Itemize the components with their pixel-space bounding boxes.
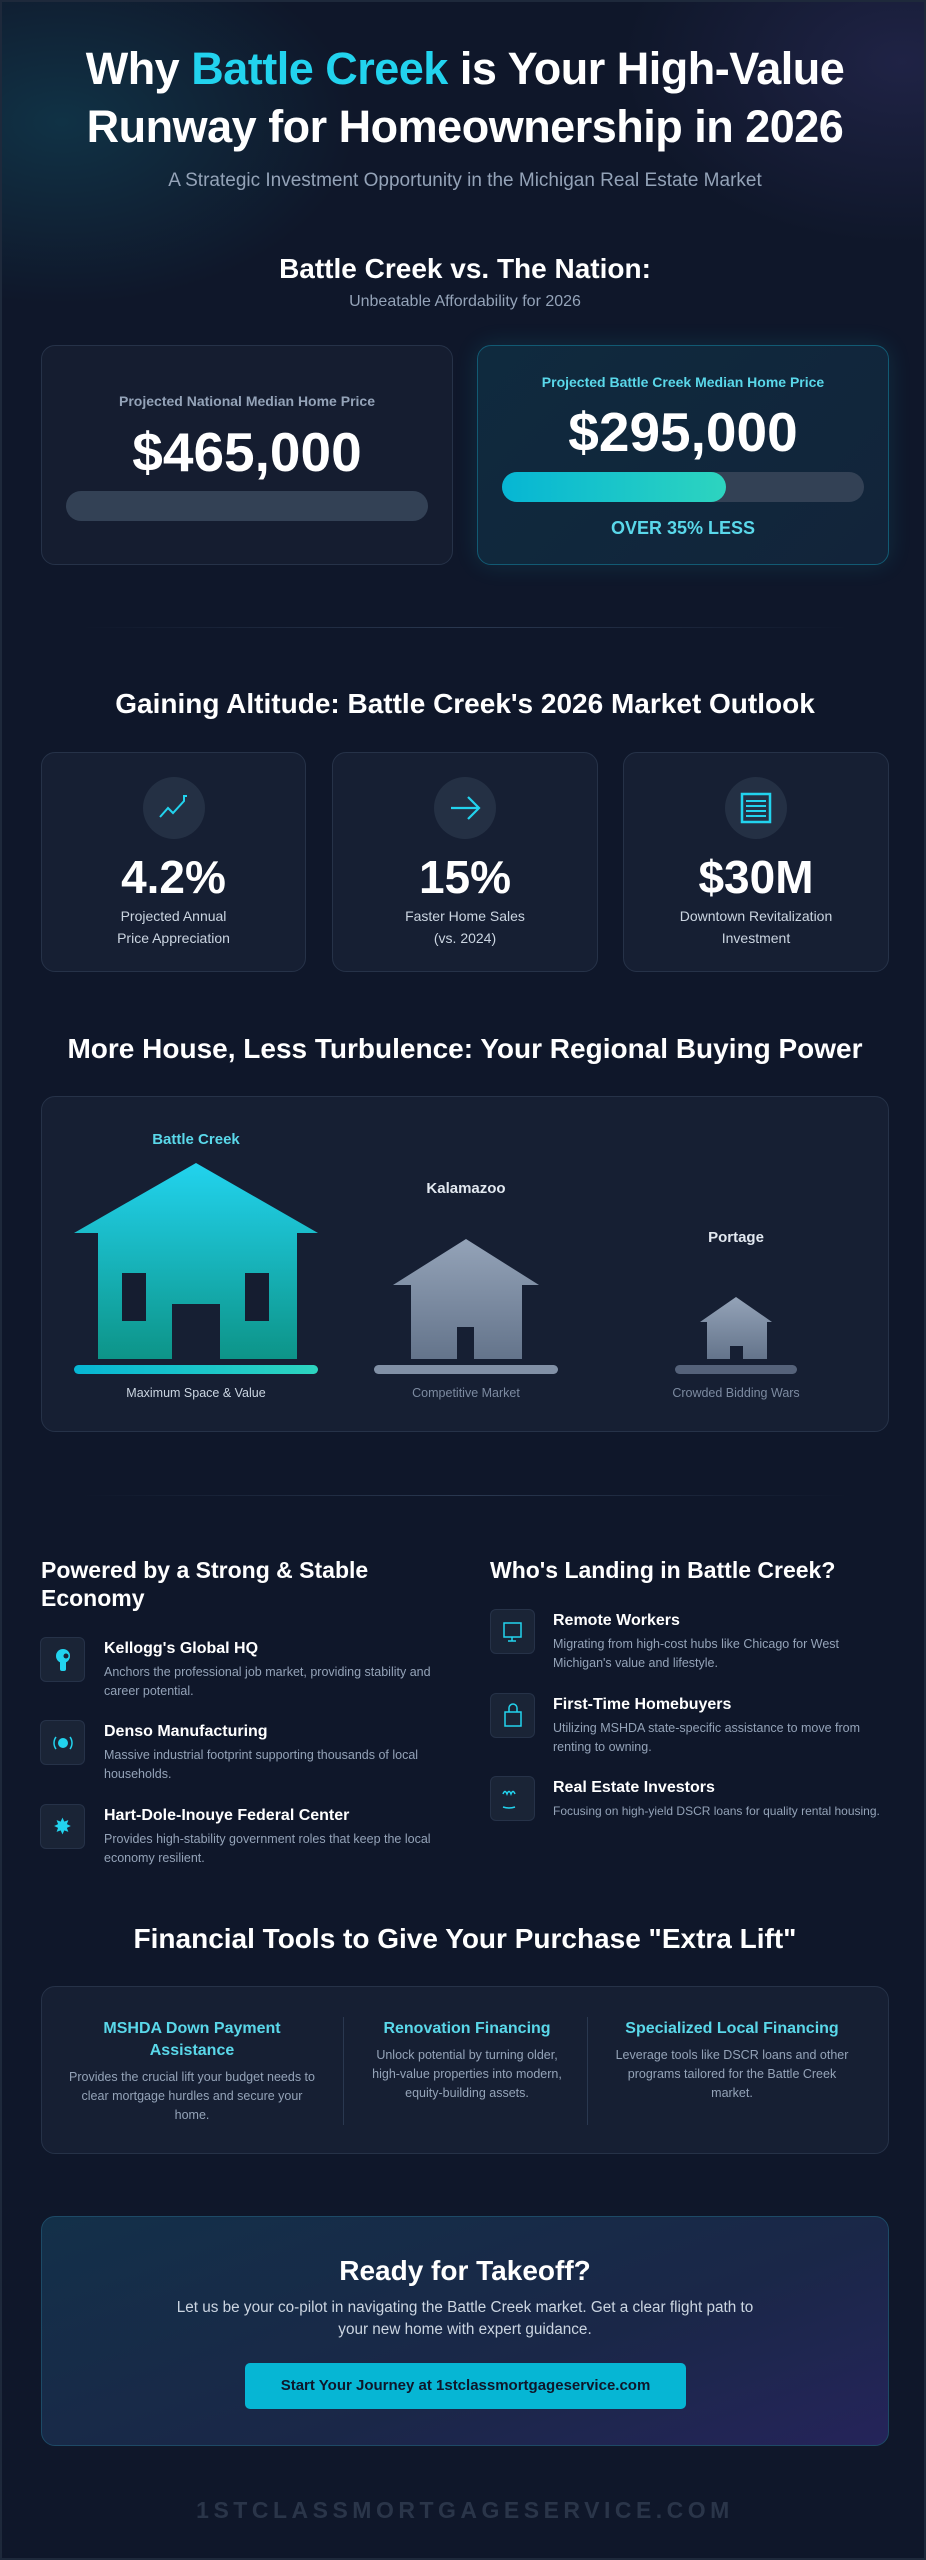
- panel: financial tools: [41, 1986, 889, 2154]
- cta text: Let us be your co-pilot in navigating the Battle Creek market. Get a clear flight path to your new home with expert guidance.: [177, 2299, 753, 2338]
- stat label: Faster Home Sales: [405, 908, 525, 924]
- item: first-time buyers: Utilizing MSHDA state-specific assistance to move from renting to owning.: [553, 1721, 860, 1754]
- tool: MSHDA: [69, 2020, 315, 2122]
- heading: financial tools: Financial Tools to Give Your Purchase "Extra Lift": [134, 1923, 796, 1954]
- house: kalamazoo: Competitive Market: [412, 1386, 520, 1400]
- item: remote workers: Remote Workers: [553, 1612, 680, 1629]
- subheading: Unbeatable Affordability for 2026: [349, 293, 581, 310]
- item: first-time buyers: First-Time Homebuyers: [553, 1696, 731, 1713]
- item: remote workers: Migrating from high-cost hubs like Chicago for West Michigan's value and lifestyle.: [553, 1637, 839, 1670]
- icon: star: [40, 1804, 85, 1849]
- stat card: investment: [623, 752, 889, 972]
- icon: bag: [490, 1693, 535, 1738]
- stat label: Projected Annual: [121, 908, 226, 924]
- tool: specialized: Leverage tools like DSCR loans and other programs tailored for the Battle Creek market.: [616, 2048, 848, 2100]
- item: federal center: Hart-Dole-Inouye Federal Center: [104, 1807, 349, 1824]
- house: battle creek: Maximum Space & Value: [126, 1386, 266, 1400]
- item: investors: Focusing on high-yield DSCR loans for quality rental housing.: [553, 1804, 880, 1818]
- bar bc: [502, 472, 864, 502]
- stat label: (vs. 2024): [434, 930, 496, 946]
- panel: houses: [41, 1096, 889, 1432]
- heading: landing: Who's Landing in Battle Creek?: [490, 1557, 835, 1583]
- stat $30M: $30M: [698, 851, 814, 903]
- icon: kellogg: [40, 1637, 85, 1682]
- tool: MSHDA: MSHDA Down Payment: [103, 2020, 281, 2037]
- heading: vs nation: Battle Creek vs. The Nation:: [279, 253, 651, 284]
- footer: 1STCLASSMORTGAGESERVICE.COM: [196, 2497, 734, 2523]
- icon: arrow: [434, 777, 496, 839]
- item: kellogg: [40, 1637, 431, 1698]
- tool: specialized: [616, 2020, 848, 2100]
- callout less: OVER 35% LESS: [611, 518, 755, 538]
- label bc: Projected Battle Creek Median Home Price: [542, 374, 824, 390]
- item: federal center: Provides high-stability government roles that keep the local economy resilient.: [104, 1832, 431, 1865]
- stat label: [117, 908, 230, 946]
- bar national: [66, 491, 428, 521]
- tool: MSHDA: Provides the crucial lift your budget needs to clear mortgage hurdles and secure your home.: [69, 2070, 315, 2122]
- stat label: Investment: [722, 930, 790, 946]
- stat card: sales: [332, 752, 598, 972]
- stat label: [680, 908, 832, 946]
- subtitle: A Strategic Investment Opportunity in the Michigan Real Estate Market: [168, 170, 762, 191]
- stat 4.2%: 4.2%: [121, 851, 226, 903]
- item: denso: Massive industrial footprint supporting thousands of local households.: [104, 1748, 418, 1781]
- stat card: appreciation: [41, 752, 306, 972]
- house: portage: Portage: [708, 1229, 764, 1246]
- label national: Projected National Median Home Price: [119, 393, 375, 409]
- house: kalamazoo: [374, 1180, 558, 1400]
- heading: economy: Powered by a Strong & Stable Economy: [41, 1557, 368, 1611]
- icon: star: ✸: [53, 1814, 72, 1839]
- tool: renovation: Renovation Financing: [383, 2020, 551, 2037]
- house: portage: [672, 1229, 800, 1400]
- item: remote workers: [490, 1609, 839, 1670]
- house: battle creek: Battle Creek: [152, 1131, 240, 1148]
- item: denso: [40, 1720, 418, 1781]
- house: battle creek: [74, 1131, 318, 1400]
- cta button: [245, 2363, 686, 2409]
- item: investors: Real Estate Investors: [553, 1779, 715, 1796]
- title: Why Battle Creek is Your High-Value: [86, 43, 844, 94]
- stat 15%: 15%: [419, 851, 511, 903]
- tool: specialized: Specialized Local Financing: [625, 2020, 839, 2037]
- house: portage: Crowded Bidding Wars: [672, 1386, 800, 1400]
- panel: national price: [41, 345, 453, 565]
- title: Runway for Homeownership in 2026: [87, 101, 843, 152]
- title: [86, 43, 844, 152]
- icon: investors: [490, 1776, 535, 1821]
- panel: CTA: [41, 2216, 889, 2446]
- item: federal center: [40, 1804, 431, 1865]
- house: kalamazoo: Kalamazoo: [426, 1180, 506, 1197]
- icon: trend: [142, 777, 204, 839]
- tool: renovation: [372, 2020, 562, 2100]
- tool: renovation: Unlock potential by turning older, high-value properties into modern, equity-building assets.: [372, 2048, 562, 2100]
- icon: monitor: [490, 1609, 535, 1654]
- cta heading: Ready for Takeoff?: [339, 2255, 591, 2286]
- stat label: Downtown Revitalization: [680, 908, 832, 924]
- panel: battle creek price: [477, 345, 889, 565]
- item: kellogg: Kellogg's Global HQ: [104, 1640, 258, 1657]
- icon: denso: [40, 1720, 85, 1765]
- heading: buying power: More House, Less Turbulence: Your Regional Buying Power: [67, 1033, 863, 1064]
- price bc: $295,000: [568, 401, 798, 463]
- item: investors: [490, 1776, 880, 1821]
- price national: $465,000: [132, 421, 362, 483]
- heading: outlook: Gaining Altitude: Battle Creek's 2026 Market Outlook: [115, 688, 815, 719]
- item: first-time buyers: [490, 1693, 860, 1754]
- stat label: Price Appreciation: [117, 930, 230, 946]
- cta button: Start Your Journey at 1stclassmortgageservice.com: [281, 2377, 650, 2394]
- stat label: [405, 908, 525, 946]
- item: denso: Denso Manufacturing: [104, 1723, 268, 1740]
- tool: MSHDA: Assistance: [150, 2042, 234, 2059]
- icon: building: [725, 777, 787, 839]
- item: kellogg: Anchors the professional job market, providing stability and career potential.: [104, 1665, 431, 1698]
